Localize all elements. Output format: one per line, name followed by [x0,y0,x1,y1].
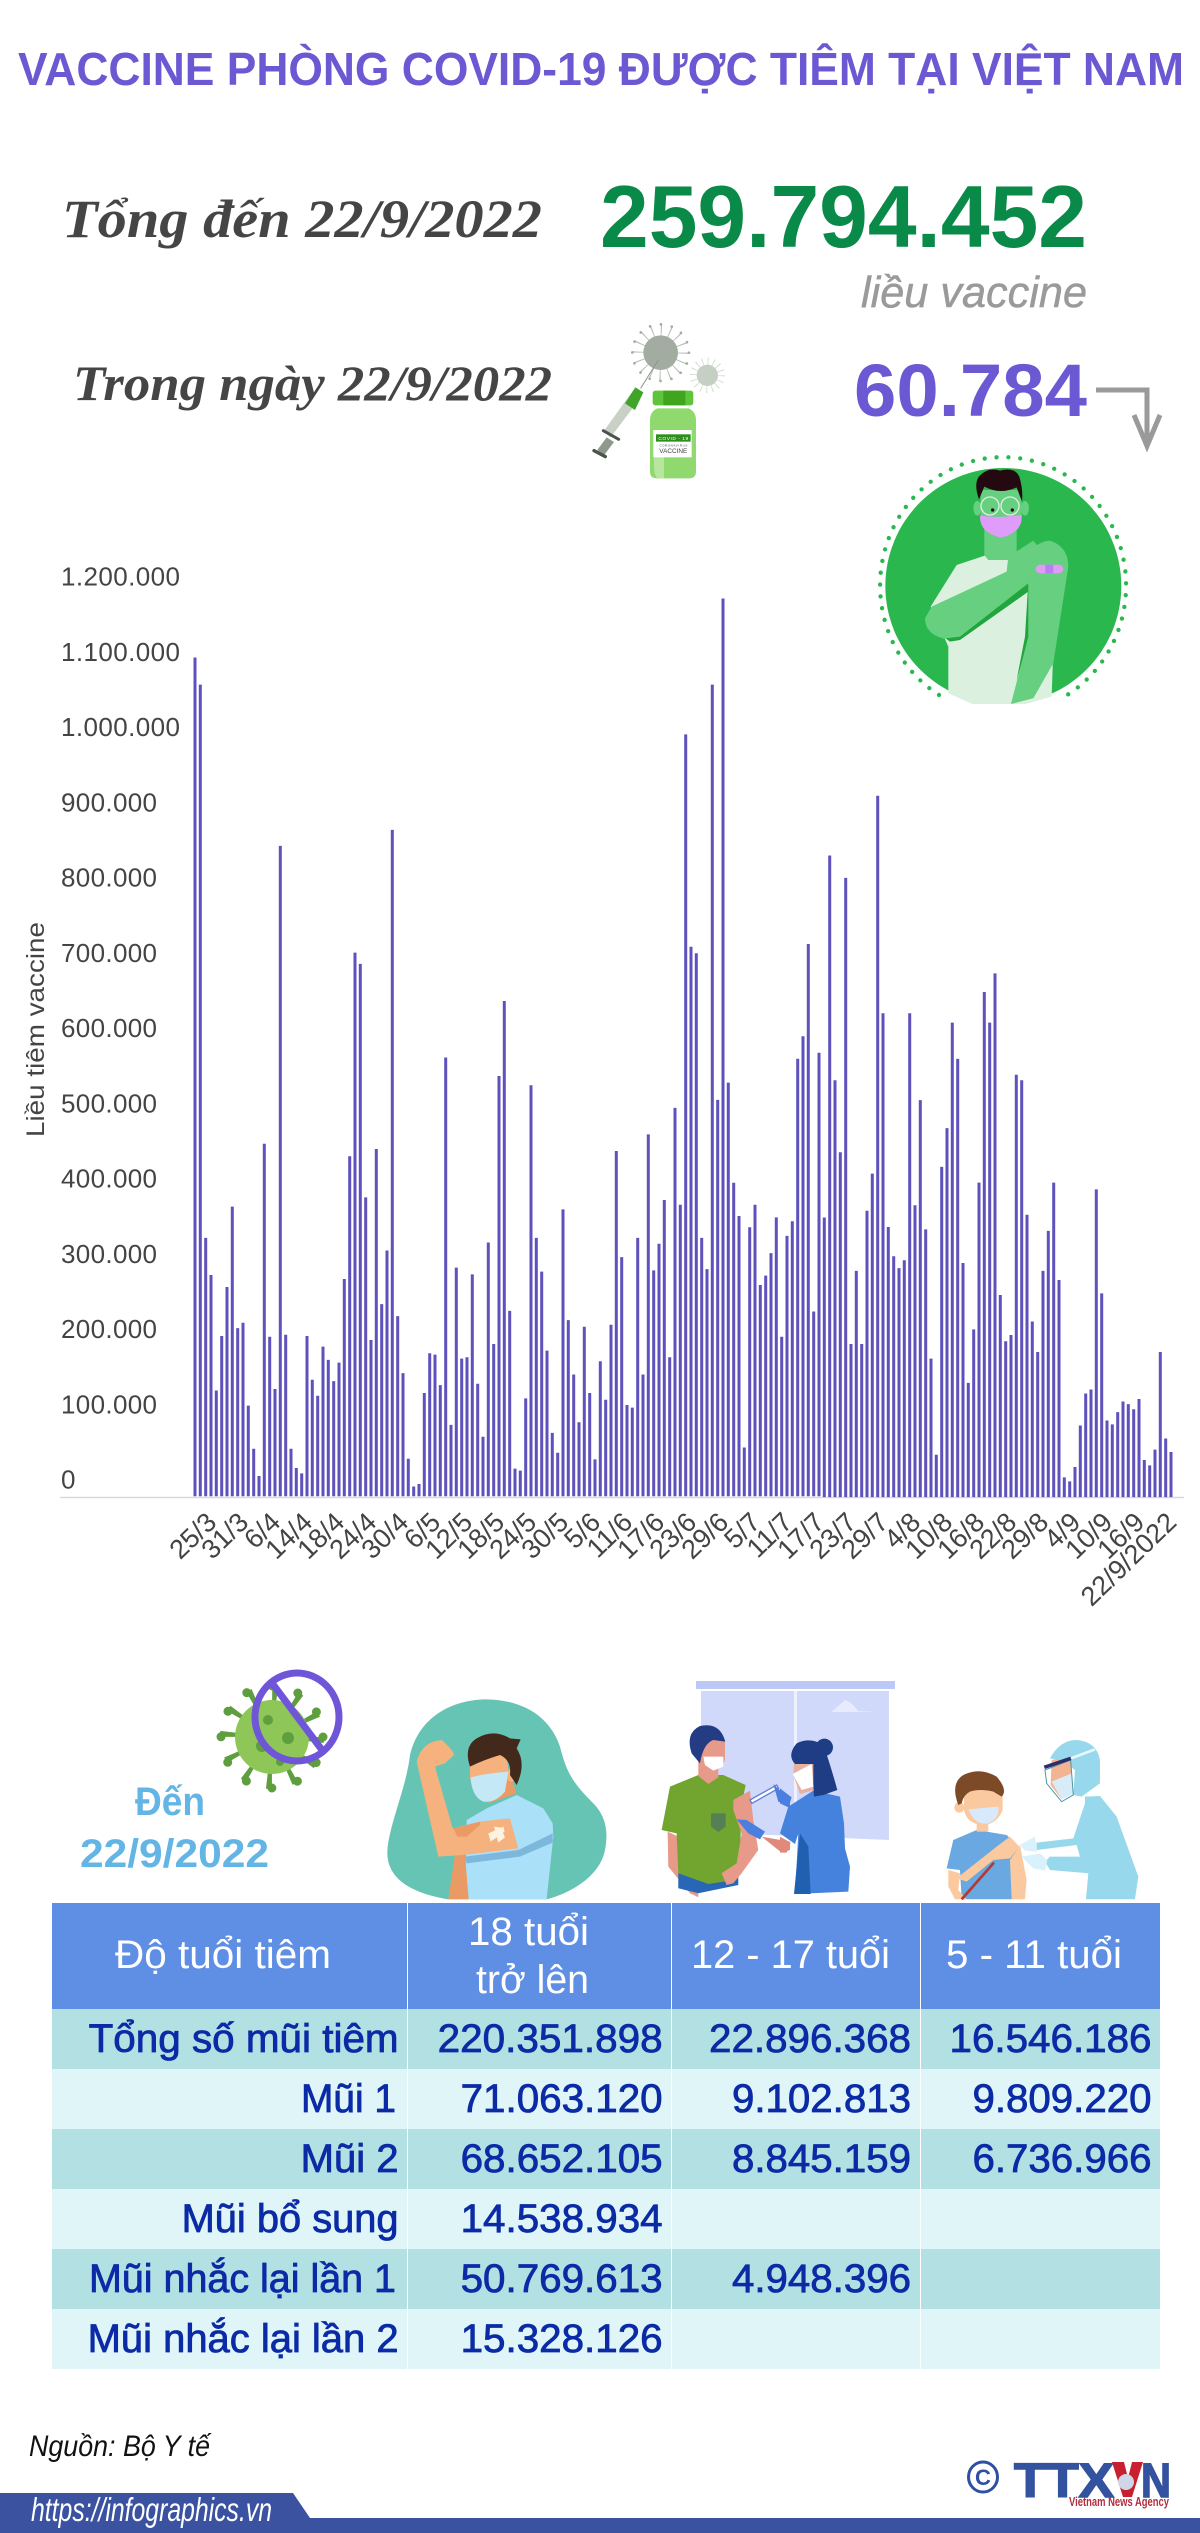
row: booster 1: 50.769.613 [461,2257,663,2301]
icon: syringe and vaccine vial [594,324,721,478]
icon: syringe [594,360,658,457]
man figure [885,468,1121,713]
table header: 18 tuổi [468,1910,589,1954]
x axis date labels: 10/8 [900,1507,958,1565]
x axis date labels: 5/7 [718,1507,766,1554]
child [947,1771,1027,1899]
row: dose 1: Mũi 1 [301,2077,396,2121]
x axis date labels: 30/5 [516,1507,574,1565]
logo: TTXVN: C [975,2465,991,2490]
table header: 12 - 17 tuổi [691,1933,890,1977]
x axis date labels: 29/7 [836,1507,894,1565]
illustration: child being vaccinated [947,1740,1138,1899]
x axis date labels: 16/9 [1092,1507,1150,1565]
row backgrounds [52,1903,1160,2369]
y axis labels: 1.100.000 [61,637,180,667]
x axis date labels [164,1507,1182,1612]
icon: large virus [632,324,689,381]
logo: TTXVN: N [1141,2455,1171,2508]
x axis date labels: 14/4 [260,1507,318,1565]
y axis title: Liều tiêm vaccine [22,922,50,1137]
y axis labels: 100.000 [61,1389,157,1419]
illustration: nurse [780,1739,850,1894]
torso [465,1795,553,1899]
row: additional dose: Mũi bổ sung [182,2197,399,2241]
teal blob [387,1699,606,1899]
x axis date labels: 30/4 [356,1507,414,1565]
y axis labels: 200.000 [61,1314,157,1344]
icon: small virus [694,362,721,389]
x axis date labels: 11/6 [581,1507,638,1563]
row: booster 2 [88,2316,663,2361]
icon: vaccine vial: COVID - 19 [658,436,689,442]
table header: 5 - 11 tuổi [946,1933,1122,1977]
label: in the day: Trong ngày 22/9/2022 [73,355,552,411]
row: dose 1: 71.063.120 [461,2077,663,2121]
y axis labels: 800.000 [61,862,157,892]
icon: vaccine vial [650,391,696,478]
x axis date labels: 12/5 [420,1507,478,1565]
illustration: adult with bandaged arm [387,1699,606,1899]
x axis date labels: 29/8 [996,1507,1054,1565]
date label: to 22/9/2022 [80,1780,269,1876]
table header: Độ tuổi tiêm [115,1933,331,1977]
x axis date labels: 17/6 [612,1507,670,1565]
x axis date labels: 17/7 [772,1507,830,1565]
icon: crossed-out virus [221,1673,339,1788]
x axis date labels: 16/8 [932,1507,990,1565]
row: additional dose: 14.538.934 [461,2197,663,2241]
x axis date labels: 29/6 [676,1507,734,1565]
label: total to date: Tổng đến 22/9/2022 [62,189,542,249]
x axis date labels: 18/5 [452,1507,510,1565]
x axis date labels: 25/3 [164,1507,222,1565]
footer band with URL: https://infographics.vn [31,2491,272,2528]
icon: vaccine vial: CORONAVIRUS [659,443,687,447]
icon: vaccine vial: VACCINE [659,448,687,455]
bars: second part [824,796,1171,1497]
table header: trở lên [476,1958,589,2002]
raised arm [417,1740,518,1857]
table: doses by age group [52,1903,1160,2369]
total doses number: 259.794.452 [600,167,1087,266]
illustration: vaccinated man in green circle [880,457,1126,713]
y axis labels: 700.000 [61,938,157,968]
row: additional dose [182,2197,663,2241]
y axis labels: 1.200.000 [61,562,180,592]
arrow: decrease [1096,390,1160,446]
row: total doses [89,2017,1151,2061]
date label: to 22/9/2022: 22/9/2022 [80,1832,269,1876]
row: dose 1: 9.102.813 [732,2077,911,2121]
row: dose 2: 68.652.105 [461,2137,663,2181]
row: booster 2: 15.328.126 [461,2317,663,2361]
y axis labels [61,562,180,1494]
neck and head [488,1773,517,1803]
bars: first part [195,599,819,1496]
row: total doses: 22.896.368 [709,2017,911,2061]
x axis date labels: 23/6 [644,1507,702,1565]
x axis date labels: 23/7 [804,1507,862,1565]
y axis labels: 900.000 [61,787,157,817]
x axis date labels: 6/5 [398,1507,446,1554]
x axis date labels: 5/6 [558,1507,606,1554]
row: booster 1: 4.948.396 [732,2257,911,2301]
row: dose 2: 6.736.966 [972,2137,1152,2181]
illustration: window [696,1681,895,1840]
x axis date labels: 4/8 [878,1507,926,1554]
logo: TTXVN [968,2455,1171,2509]
y axis labels: 400.000 [61,1164,157,1194]
x axis date labels: 24/4 [324,1507,382,1565]
daily doses number: 60.784 [854,349,1087,432]
row: booster 1: Mũi nhắc lại lần 1 [89,2256,396,2301]
unit: doses: liều vaccine [861,268,1087,317]
row: dose 1: 9.809.220 [972,2077,1152,2121]
row: dose 2: 8.845.159 [732,2137,911,2181]
x axis date labels: 31/3 [196,1507,254,1565]
x axis date labels: 22/9/2022 [1075,1507,1182,1612]
x axis date labels: 4/9 [1038,1507,1086,1554]
source note: Nguồn: Bộ Y tế [29,2430,212,2463]
illustration: teen being vaccinated [662,1725,790,1897]
row: dose 2 [301,2137,1152,2181]
dotted ring [880,457,1126,698]
table header [52,1903,1160,2009]
logo: TTXVN: TTX [1014,2455,1114,2508]
y axis labels: 600.000 [61,1013,157,1043]
y axis labels: 0 [61,1464,75,1494]
y axis labels: 500.000 [61,1088,157,1118]
row: total doses: 16.546.186 [950,2017,1152,2061]
x axis date labels: 10/9 [1060,1507,1118,1565]
footer band with URL [0,2491,1200,2533]
row: booster 2: Mũi nhắc lại lần 2 [88,2316,399,2361]
x axis date labels: 11/7 [741,1507,798,1563]
row: dose 1 [301,2077,1152,2121]
bar chart: daily doses [22,562,1184,1612]
y axis labels: 1.000.000 [61,712,180,742]
row: dose 2: Mũi 2 [301,2137,399,2181]
title: VACCINE PHÒNG COVID-19 ĐƯỢC TIÊM TẠI VIỆT NAM [18,43,1184,95]
row: total doses: Tổng số mũi tiêm [89,2017,399,2061]
x axis date labels: 24/5 [484,1507,542,1565]
axis line [60,1496,1184,1498]
row: booster 1 [89,2256,911,2301]
health worker in protective suit [1020,1740,1138,1899]
x axis date labels: 6/4 [238,1507,286,1554]
x axis date labels: 18/4 [292,1507,350,1565]
row: total doses: 220.351.898 [438,2017,663,2061]
x axis date labels: 22/8 [964,1507,1022,1565]
y axis labels: 300.000 [61,1239,157,1269]
date label: to 22/9/2022: Đến [135,1780,205,1824]
